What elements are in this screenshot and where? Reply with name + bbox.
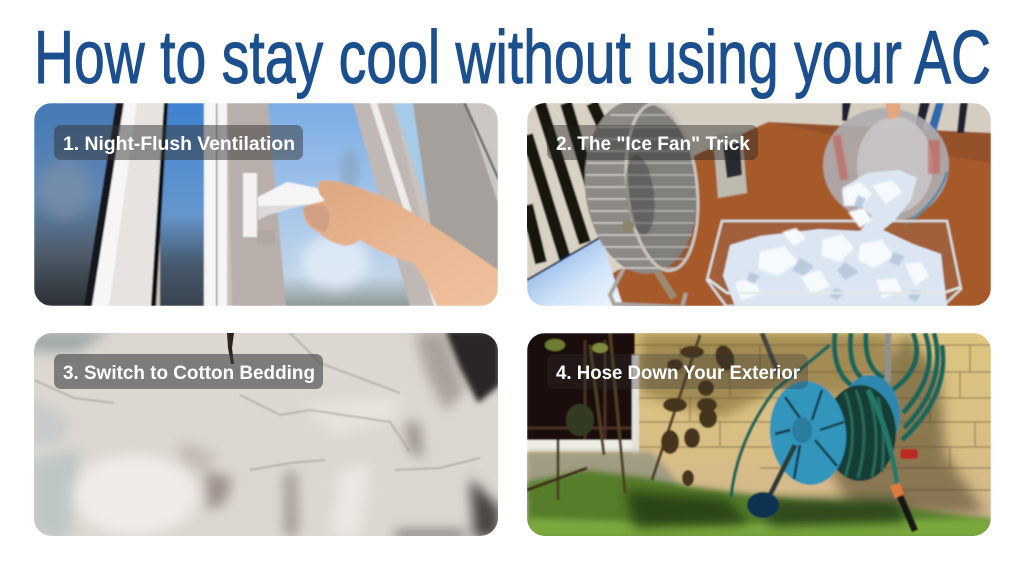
panel: night-flush ventilation (34, 103, 498, 306)
reel hose drum (834, 384, 897, 482)
climbing plant (527, 333, 700, 500)
fan (583, 103, 701, 306)
photo: crumpled sheets (30, 330, 500, 540)
grass (527, 466, 991, 536)
photo: hose reel against a brick wall (527, 333, 991, 550)
label: 2. The "Ice Fan" Trick (547, 125, 758, 160)
window (527, 333, 639, 455)
reel back disc (848, 374, 901, 435)
coiled hose on wall (731, 333, 943, 497)
label: 1. Night-Flush Ventilation (54, 125, 303, 160)
photo: hand opening a window (34, 103, 498, 306)
clock device (713, 132, 747, 198)
panel: ice fan trick (527, 95, 991, 307)
panel: hose down exterior (527, 333, 991, 550)
label: 3. Switch to Cotton Bedding (54, 354, 323, 389)
measuring bowl (823, 103, 949, 224)
photo: fan and tray of ice (527, 95, 991, 307)
label: 2. The "Ice Fan" Trick: 2. The "Ice Fan" Trick (556, 134, 750, 155)
label: 1. Night-Flush Ventilation: 1. Night-Flush Ventilation (63, 134, 295, 155)
hand (303, 180, 498, 306)
reel front disc (768, 380, 848, 486)
panel: cotton bedding (30, 330, 500, 540)
ice tray (707, 170, 961, 306)
label: 3. Switch to Cotton Bedding: 3. Switch to Cotton Bedding (63, 363, 315, 384)
window handle (242, 172, 326, 238)
brick courses (635, 345, 991, 490)
label: 4. Hose Down Your Exterior (547, 354, 808, 389)
label: 4. Hose Down Your Exterior: 4. Hose Down Your Exterior (556, 363, 801, 384)
